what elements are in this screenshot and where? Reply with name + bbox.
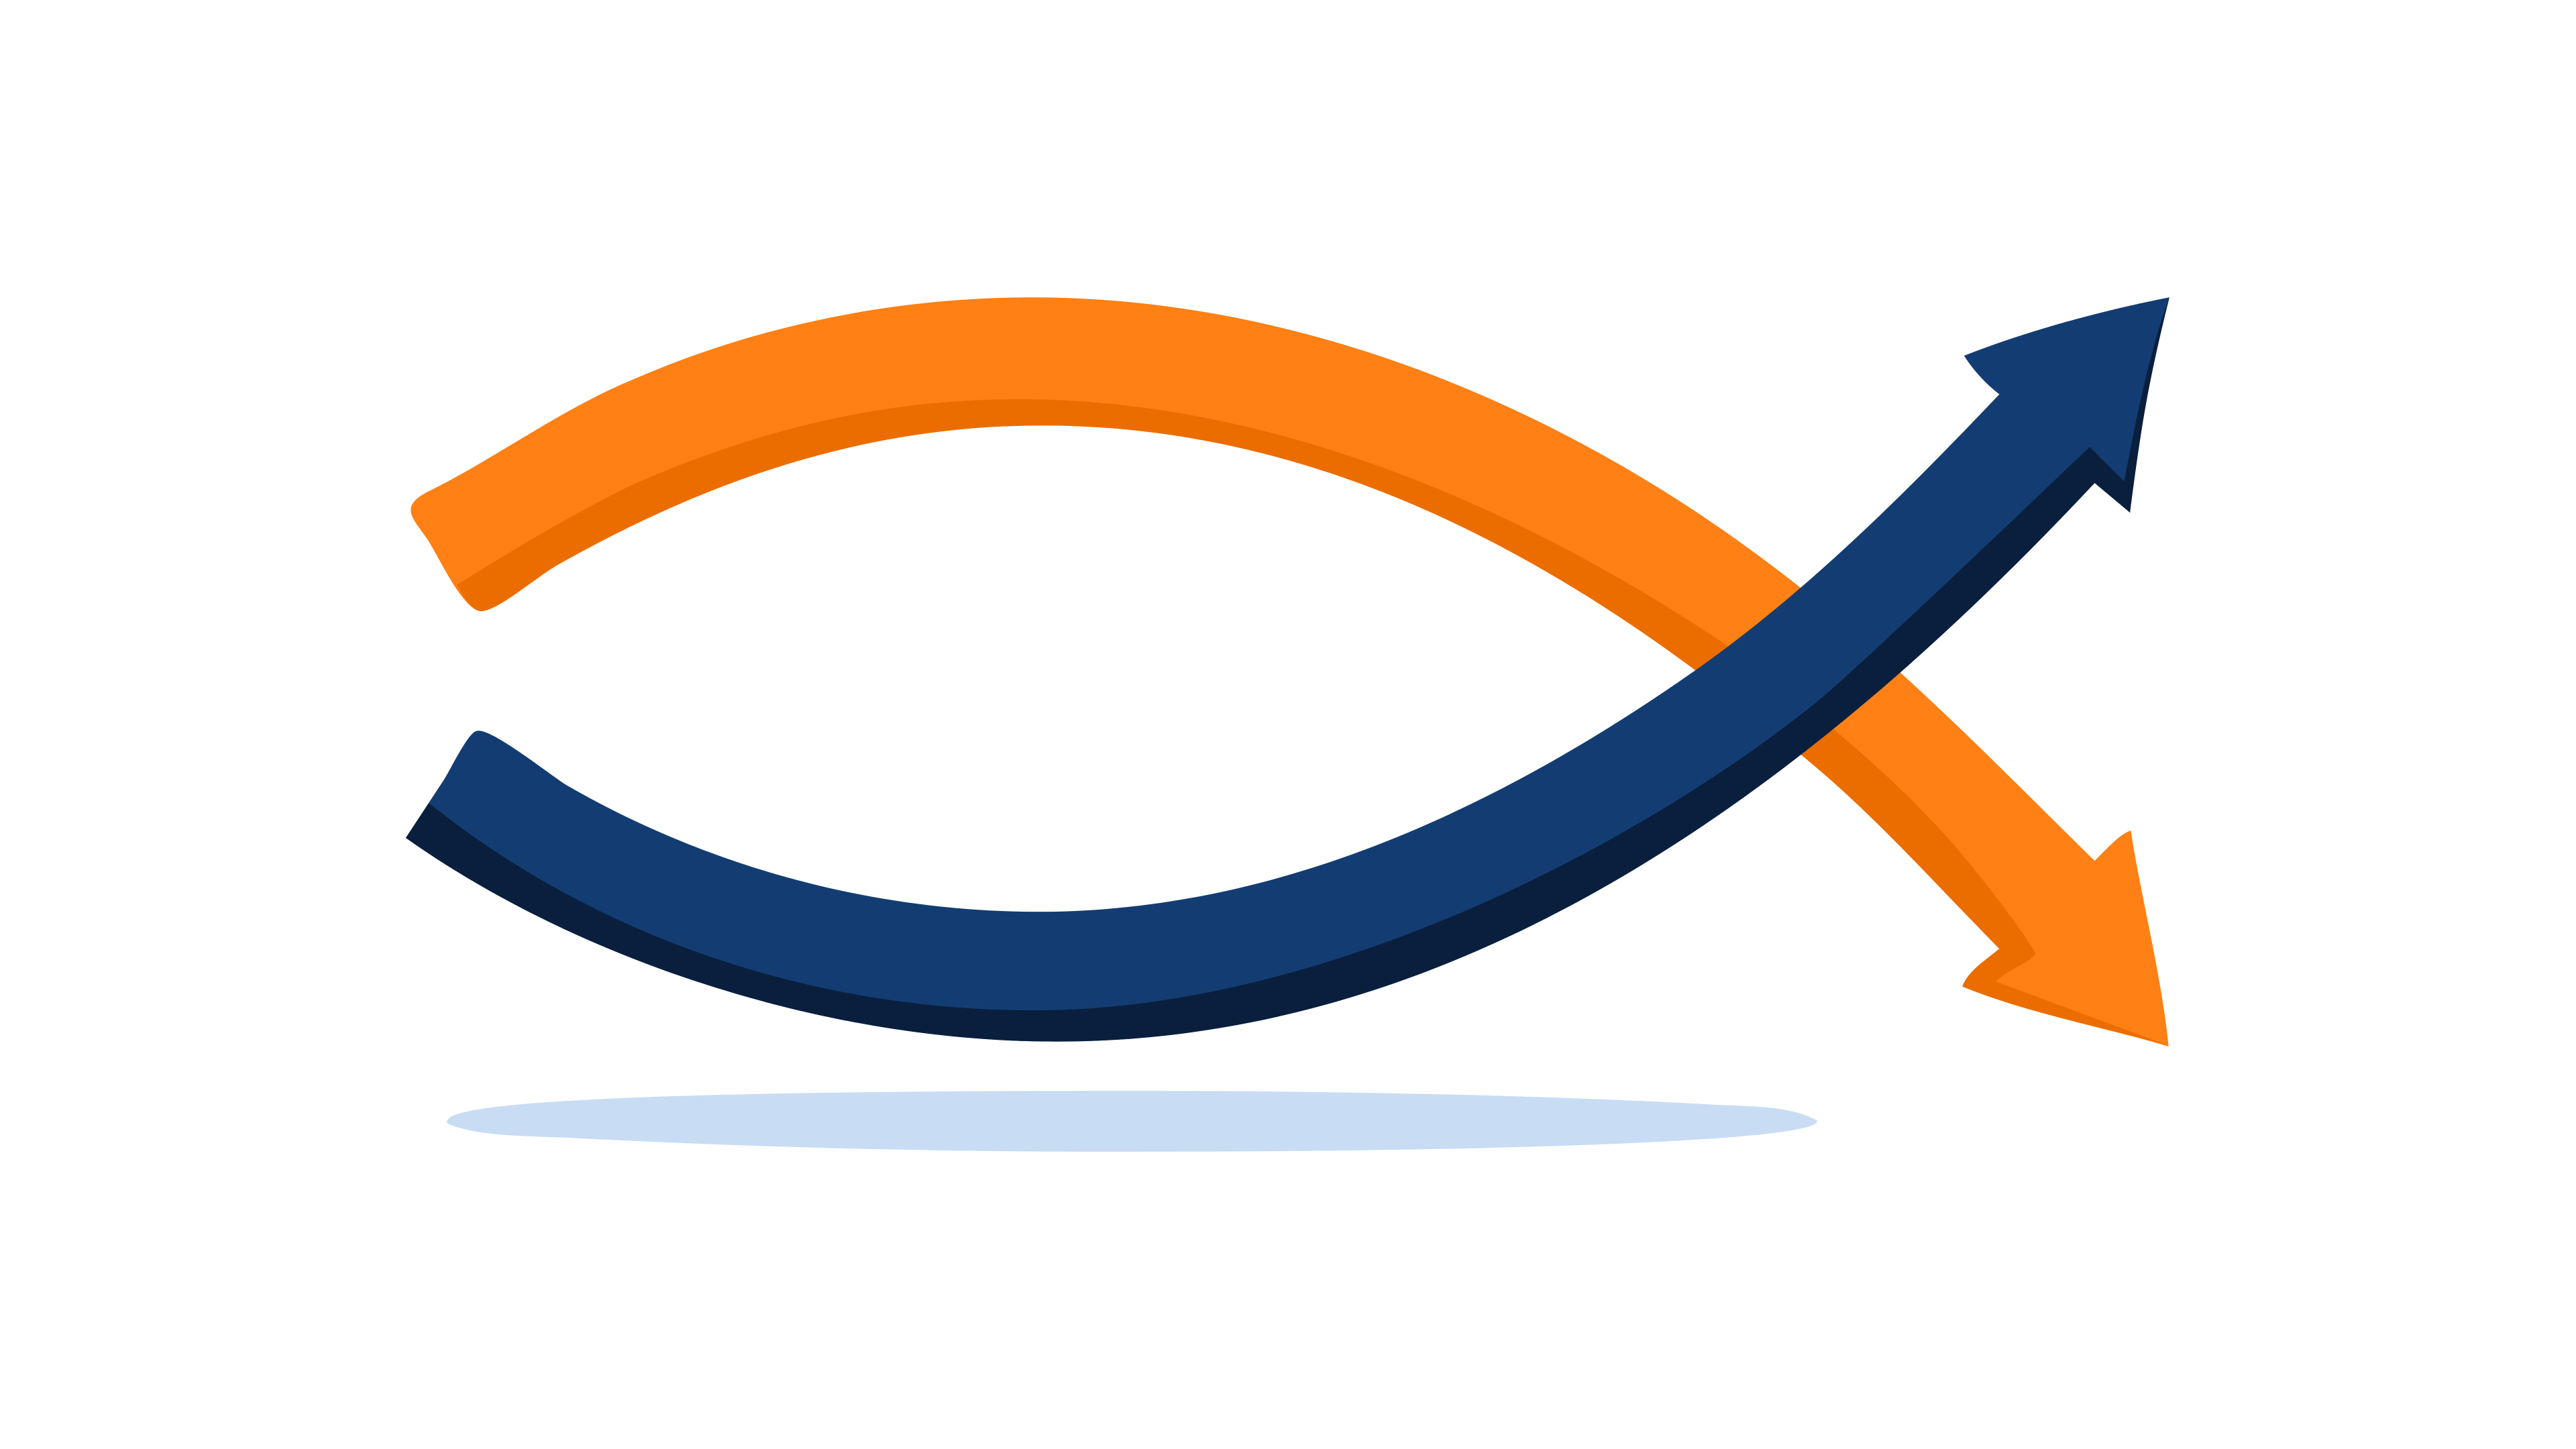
blue arrow shaded underside bbox=[406, 297, 2169, 1042]
orange arrow bbox=[411, 297, 2169, 1046]
blue arrow bbox=[406, 297, 2169, 1042]
blue arrow body bbox=[406, 297, 2169, 1042]
orange arrow body bbox=[411, 297, 2169, 1046]
ground shadow bbox=[447, 1091, 1817, 1152]
orange arrow shaded underside bbox=[457, 399, 2169, 1046]
